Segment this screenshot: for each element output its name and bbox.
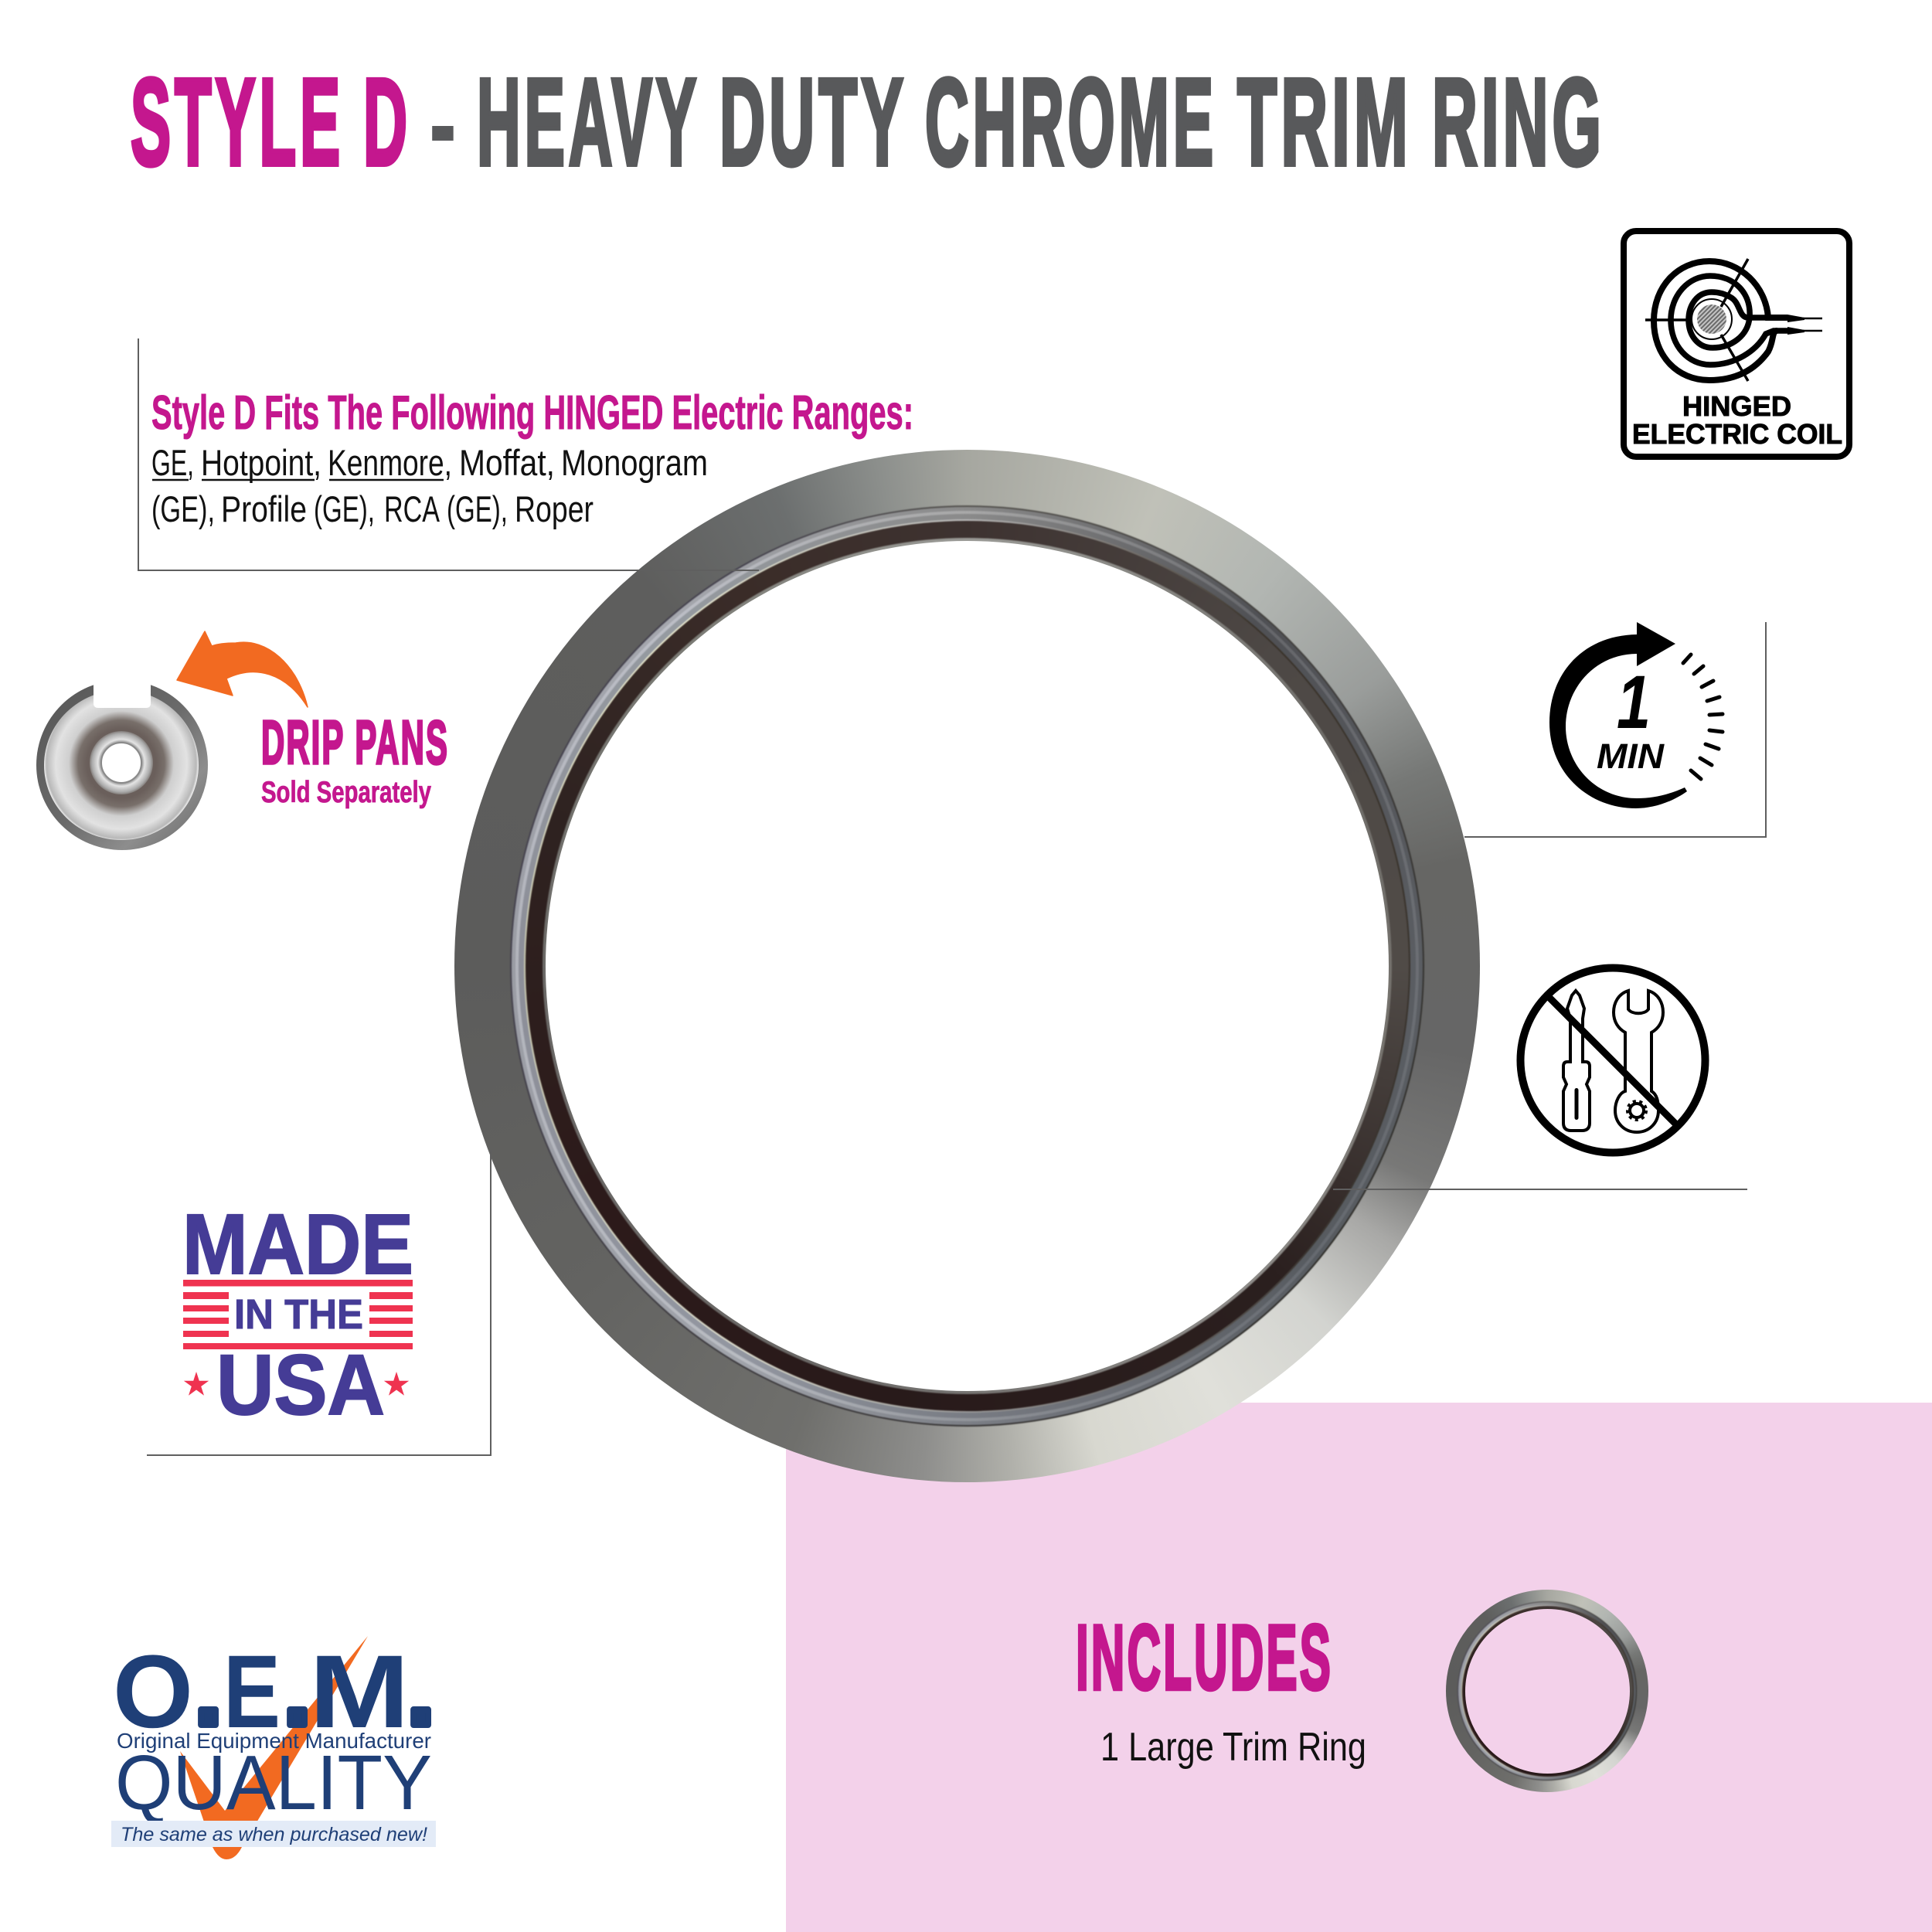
arrow: orange pointing to drip pan — [177, 631, 308, 707]
brand list line 2: (GE), — [314, 488, 375, 529]
brand list line 1: GE, — [151, 442, 194, 483]
small chrome trim ring in includes panel — [1446, 1590, 1648, 1792]
includes item: 1 Large Trim Ring — [1100, 1725, 1366, 1770]
text block: compatible ranges — [151, 386, 913, 529]
underlines for hinged brands — [152, 479, 444, 481]
title: product name: RING — [1432, 53, 1605, 191]
drip pans label — [261, 708, 449, 809]
brand list line 1: Monogram — [561, 442, 708, 483]
oem letters: . — [406, 1632, 435, 1747]
brand list line 2: (GE), — [151, 488, 215, 529]
quality: QUALITY — [115, 1740, 432, 1826]
oem letters: . — [283, 1632, 311, 1747]
panel: includes background — [786, 1403, 1932, 1932]
callout line: compatible ranges — [138, 338, 759, 570]
brand list line 2: (GE), — [447, 488, 508, 529]
icon: one minute timer — [1549, 622, 1723, 808]
brand list line 2: RCA — [384, 488, 440, 529]
brand list line 2: Profile — [221, 488, 307, 529]
drip pan image — [36, 672, 208, 850]
wrench — [1614, 991, 1663, 1132]
original equipment manufacturer: Original Equipment Manufacturer — [117, 1729, 431, 1753]
badge label line 2: ELECTRIC COIL — [1632, 418, 1842, 450]
icon: no tools required — [1521, 968, 1705, 1153]
tagline band — [111, 1821, 436, 1847]
oem letters — [113, 1632, 435, 1750]
heading: fits following ranges: Style D Fits The Following HINGED Electric Ranges: — [151, 386, 913, 440]
made text: MADE — [182, 1197, 413, 1292]
includes text — [1076, 1606, 1366, 1770]
logo: oem quality — [111, 1632, 436, 1859]
callout line: one minute install — [1464, 622, 1766, 837]
brand list line 1 — [151, 442, 708, 483]
callout line: no tools — [1333, 1189, 1747, 1190]
includes heading: INCLUDES — [1076, 1606, 1333, 1709]
timer number: 1 — [1617, 660, 1651, 744]
sold separately: Sold Separately — [261, 776, 431, 809]
drip pan notch — [94, 672, 151, 708]
badge: made in the usa — [182, 1197, 413, 1433]
brand list line 2 — [151, 488, 594, 529]
brand list line 1: Moffat, — [459, 442, 555, 483]
drip pans heading: DRIP PANS — [261, 708, 449, 777]
flag stripes — [183, 1280, 413, 1349]
in the text: IN THE — [234, 1291, 363, 1338]
oem letters: E — [223, 1634, 281, 1750]
orange check mark — [180, 1636, 368, 1859]
title: style d: STYLE — [131, 53, 344, 191]
stars — [184, 1372, 409, 1396]
timer unit: MIN — [1597, 736, 1665, 776]
title: product name: CHROME — [925, 53, 1217, 191]
title: product name: DUTY — [719, 53, 907, 191]
oem letters: M — [309, 1634, 410, 1750]
title: product name — [477, 53, 1605, 191]
coil heating element — [1645, 259, 1822, 381]
title — [131, 53, 1605, 192]
brand list line 2: Roper — [515, 488, 594, 529]
oem letters: . — [194, 1632, 223, 1747]
oem letters: O — [113, 1634, 193, 1750]
tagline: The same as when purchased new! — [121, 1824, 427, 1845]
title: product name: TRIM — [1237, 53, 1412, 191]
title: D — [363, 53, 411, 191]
title: style d — [131, 53, 411, 191]
title: dash: - — [429, 53, 457, 192]
title: product name: HEAVY — [477, 53, 700, 191]
brand list line 1: Hotpoint, — [201, 442, 321, 483]
brand list line 1: Kenmore, — [328, 442, 452, 483]
usa text: USA — [216, 1338, 385, 1433]
screwdriver — [1563, 991, 1590, 1131]
callout line: made in usa — [147, 1150, 491, 1455]
icon: hinged electric coil badge — [1624, 231, 1849, 457]
main chrome trim ring — [454, 450, 1480, 1482]
badge label: HINGED — [1682, 390, 1791, 422]
